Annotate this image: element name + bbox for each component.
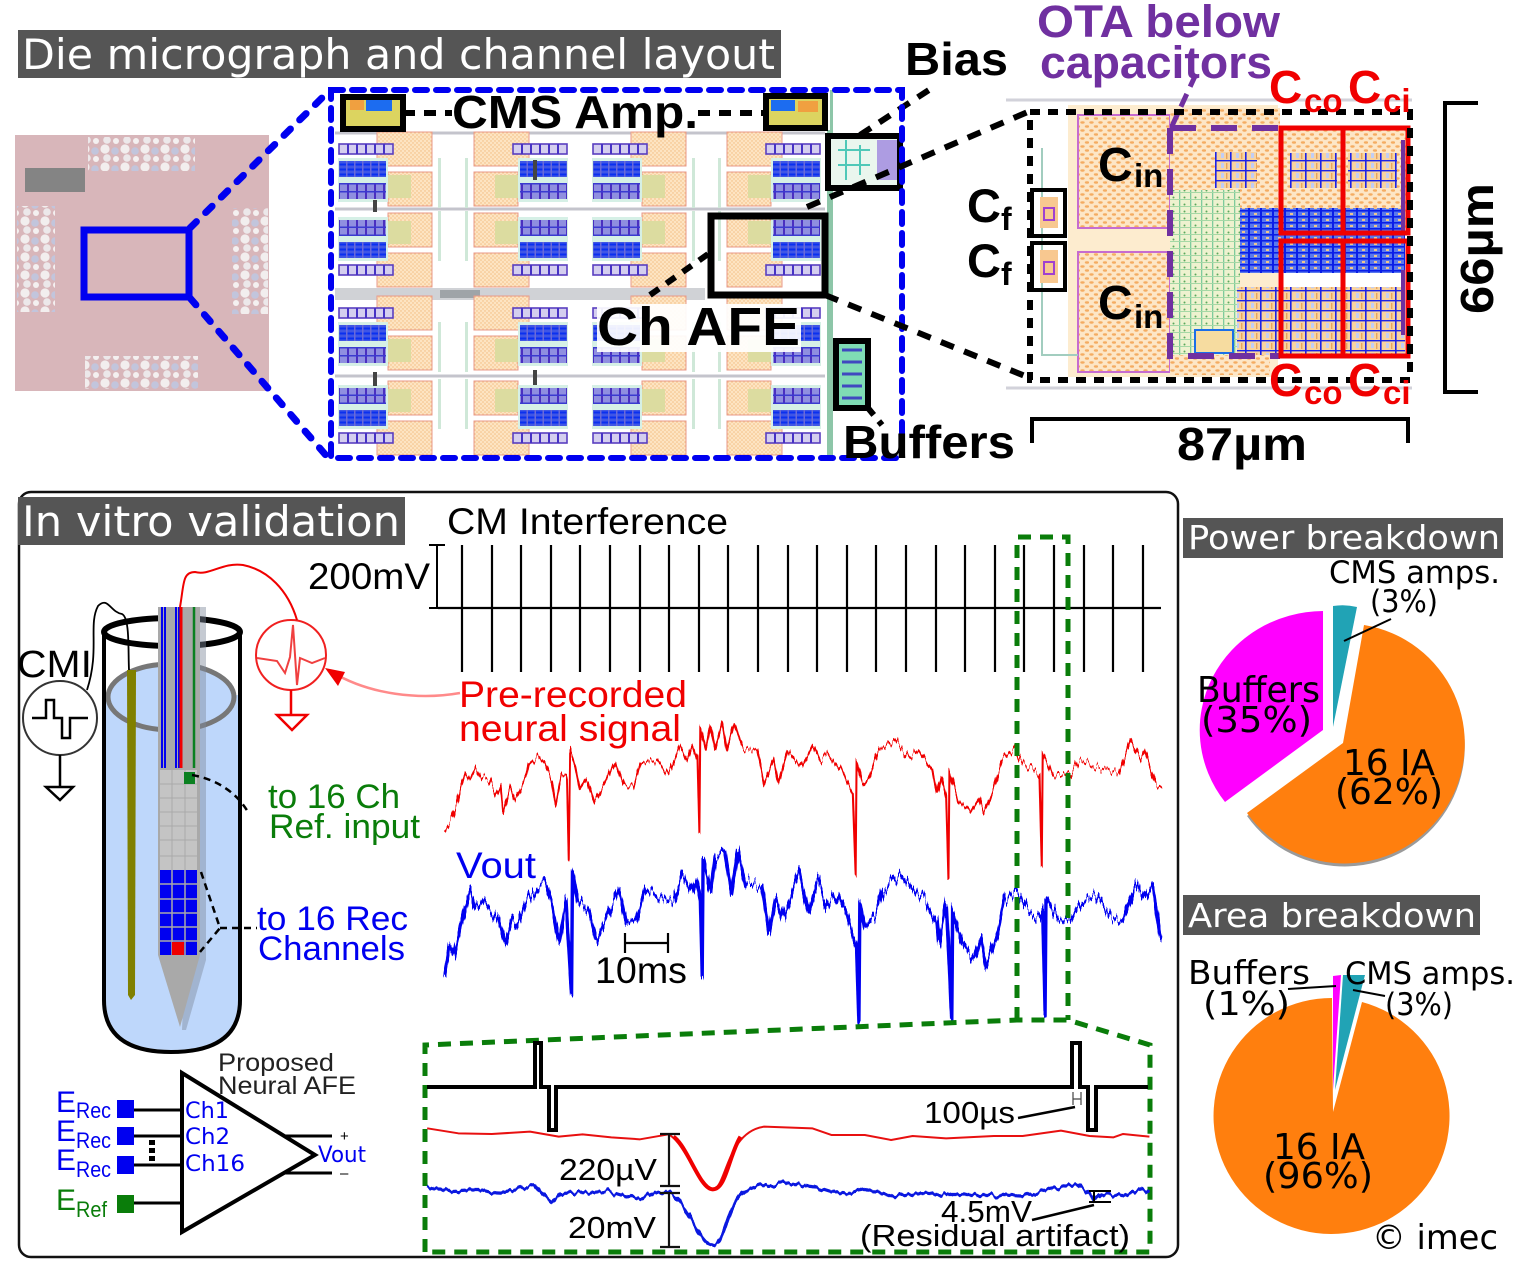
CMS amplifier callout [343,86,825,138]
pie labels [1197,555,1500,813]
10 ms scale bar: 10ms [595,950,687,991]
red capacitor labels: C [1269,354,1302,406]
copyright: © imec [1372,1218,1498,1258]
feedback capacitor boxes and labels: C [967,179,1001,232]
input capacitor labels: C [1098,139,1133,192]
CMI source with ground: CMI [17,644,92,686]
dimension: height 66 micrometres [1445,103,1503,392]
red capacitor labels: C [1348,61,1381,113]
pie labels: CMS amps. [1329,555,1500,591]
OTA below capacitors outline: capacitors [1040,37,1272,88]
heading: die micrograph and channel layout: Die micrograph and channel layout [22,30,775,79]
amplifier schematic: proposed neural AFE: E [56,1144,76,1177]
amplifier schematic: proposed neural AFE: Proposed [218,1049,334,1077]
amplifier schematic: proposed neural AFE [56,1049,366,1232]
amplifier schematic: proposed neural AFE: Neural AFE [218,1072,356,1100]
dimension: width 87 micrometres [1032,418,1408,470]
pie labels: 16 IA [1343,743,1435,784]
text: buffers label: Buffers [843,416,1015,468]
heading: in vitro validation: In vitro validation [22,497,400,546]
pie labels: (96%) [1263,1156,1373,1197]
pie labels [1188,953,1515,1197]
CM interference trace [308,501,1161,672]
channel AFE callout [597,111,1030,378]
pie labels: Buffers [1188,953,1310,992]
amplifier schematic: proposed neural AFE: E [56,1086,76,1119]
panel: in vitro validation [19,492,1178,1257]
pre-recorded neural signal trace: neural signal [459,708,681,749]
slice: 16 IA 62% [1247,625,1465,866]
leader: CMS amps [1344,619,1391,641]
channel AFE callout: Ch AFE [597,297,800,357]
input capacitor labels: in [1134,298,1163,335]
border of zoomed channel layout [331,90,902,458]
pie labels: (3%) [1370,584,1438,620]
inset: zoomed waveforms: 220µV [559,1152,657,1187]
heading: area breakdown: Area breakdown [1188,896,1476,935]
pie labels: CMS amps. [1345,956,1515,992]
CMS amplifier callout: CMS Amp. [452,86,698,138]
OTA below capacitors outline [1037,0,1403,356]
heading: power breakdown: Power breakdown [1188,518,1500,557]
panel: channel AFE layout detail [1006,100,1412,388]
input capacitor labels [1098,139,1163,335]
pie labels: Buffers [1197,670,1320,711]
pre-recorded neural signal trace: Pre-recorded [459,674,687,715]
label: reference input: Ref. input [269,808,421,846]
dimension: height 66 micrometres: 66µm [1451,183,1503,314]
leaders [1288,986,1385,996]
red capacitor labels: co [1304,82,1343,119]
CM interference trace: 200mV [308,556,430,597]
red capacitor labels: ci [1383,374,1411,411]
dimension: width 87 micrometres: 87µm [1177,418,1307,470]
inset: zoomed waveforms: 20mV [568,1210,656,1245]
pie labels: 16 IA [1273,1127,1365,1168]
10 ms scale bar [595,933,687,991]
Vout trace: Vout [456,845,537,886]
feedback capacitor boxes and labels: f [1001,256,1012,292]
amplifier schematic: proposed neural AFE: Vout [318,1143,366,1168]
label: reference input [192,775,421,846]
pie chart: power breakdown [1197,555,1500,866]
pie labels: (1%) [1203,984,1290,1023]
amplifier schematic: proposed neural AFE: Rec [76,1157,111,1182]
inset: zoomed waveforms: 100µs [924,1095,1015,1130]
pie labels: (35%) [1201,700,1312,741]
amplifier schematic: proposed neural AFE: Ref [76,1197,108,1222]
label: recording channels: to 16 Rec [257,900,408,938]
input capacitor labels: C [1098,277,1133,330]
amplifier schematic: proposed neural AFE: – [340,1165,349,1182]
amplifier schematic: proposed neural AFE: Ch2 [185,1125,230,1150]
amplifier schematic: proposed neural AFE: Ch1 [185,1099,229,1124]
test tube with probe [104,607,240,1052]
slice: CMS amps 3% [1333,605,1357,727]
label: recording channels [200,872,408,968]
pre-recorded neural signal trace [445,674,1162,877]
green zoom window over traces [1017,537,1068,1020]
inset: zoomed waveforms [425,1020,1150,1253]
CMI source with ground [17,603,129,800]
red capacitor labels: ci [1383,82,1411,119]
pie labels: (3%) [1385,987,1453,1023]
CM interference trace: CM Interference [447,501,728,542]
Vout trace [445,845,1161,1023]
red capacitor boxes [1281,128,1408,356]
slice: 16 IA 96% [1214,998,1450,1234]
amplifier schematic: proposed neural AFE: Rec [76,1128,111,1153]
pie labels: (62%) [1335,772,1443,813]
label: recording channels: Channels [258,930,405,968]
pie chart: area breakdown [1188,953,1515,1234]
red capacitor labels [1269,61,1411,411]
black dashed AFE detail frame [1030,112,1410,380]
red capacitor labels: C [1269,61,1302,113]
inset: zoomed waveforms: (Residual artifact) [860,1218,1130,1253]
amplifier schematic: proposed neural AFE: E [56,1115,76,1148]
buffers callout [836,341,882,425]
red capacitor labels: co [1304,374,1343,411]
amplifier schematic: proposed neural AFE: Ch16 [185,1152,245,1177]
red capacitor labels: C [1348,354,1381,406]
slice: CMS amps 3% [1335,975,1365,1090]
pre-recorded signal source with ground [180,565,460,730]
bias block callout: Bias [905,33,1008,85]
feedback capacitor boxes and labels: f [1001,201,1012,237]
slice: buffers 1% [1333,975,1341,1090]
amplifier schematic: proposed neural AFE: E [56,1184,76,1217]
inset: zoomed waveforms: 4.5mV [941,1194,1032,1229]
label: reference input: to 16 Ch [268,778,400,816]
slice: buffers 35% [1200,611,1323,802]
bias block callout [828,33,1008,188]
amplifier schematic: proposed neural AFE: Rec [76,1098,111,1123]
feedback capacitor boxes and labels: C [967,234,1001,287]
panel: die photograph [15,90,330,460]
panel: channel layout with 16 channels [335,90,833,458]
amplifier schematic: proposed neural AFE: + [340,1128,349,1145]
feedback capacitor boxes and labels [967,179,1065,292]
input capacitor labels: in [1134,157,1163,194]
